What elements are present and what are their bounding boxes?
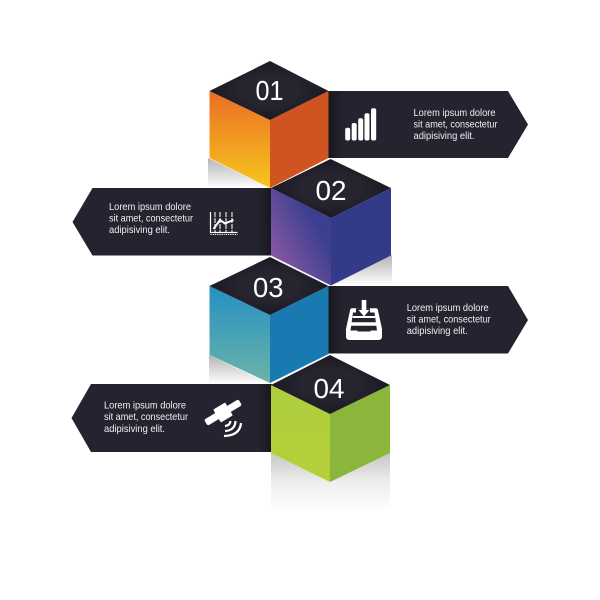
- icon: inbox tray: [346, 300, 382, 340]
- icon: line chart: [210, 212, 238, 234]
- cube 4: [271, 355, 390, 482]
- banner 4: [72, 384, 272, 452]
- cube 2: [271, 159, 391, 286]
- text block 4: Lorem ipsum dolore: [104, 401, 186, 412]
- number 01: 01: [256, 75, 284, 106]
- text block 2: adipisiving elit.: [109, 225, 170, 236]
- shadow: cube 1: [208, 158, 270, 188]
- text block 1: Lorem ipsum dolore: [414, 108, 496, 119]
- text block 4: sit amet, consectetur: [104, 412, 189, 423]
- number 03: 03: [253, 272, 284, 303]
- shadow: cube 3: [209, 355, 270, 384]
- banner 1: [328, 91, 528, 158]
- cube 3: [210, 257, 328, 383]
- text block 2: sit amet, consectetur: [109, 214, 194, 225]
- text block 3: sit amet, consectetur: [407, 315, 491, 326]
- icon: signal bars: [345, 108, 376, 140]
- cube 1: [210, 61, 328, 188]
- number 02: 02: [316, 175, 346, 206]
- text block 1: sit amet, consectetur: [414, 120, 498, 131]
- shadow: cube 2: [331, 255, 392, 285]
- shadow: cube 4: [271, 453, 390, 512]
- text block 3: Lorem ipsum dolore: [407, 303, 489, 314]
- text block 4: adipisiving elit.: [104, 424, 165, 435]
- icon: satellite: [202, 396, 244, 436]
- text block 1: adipisiving elit.: [414, 131, 474, 142]
- banner 2: [72, 188, 272, 256]
- banner 3: [328, 286, 528, 354]
- number 04: 04: [314, 373, 344, 404]
- text block 2: Lorem ipsum dolore: [109, 202, 191, 213]
- text block 3: adipisiving elit.: [407, 326, 468, 337]
